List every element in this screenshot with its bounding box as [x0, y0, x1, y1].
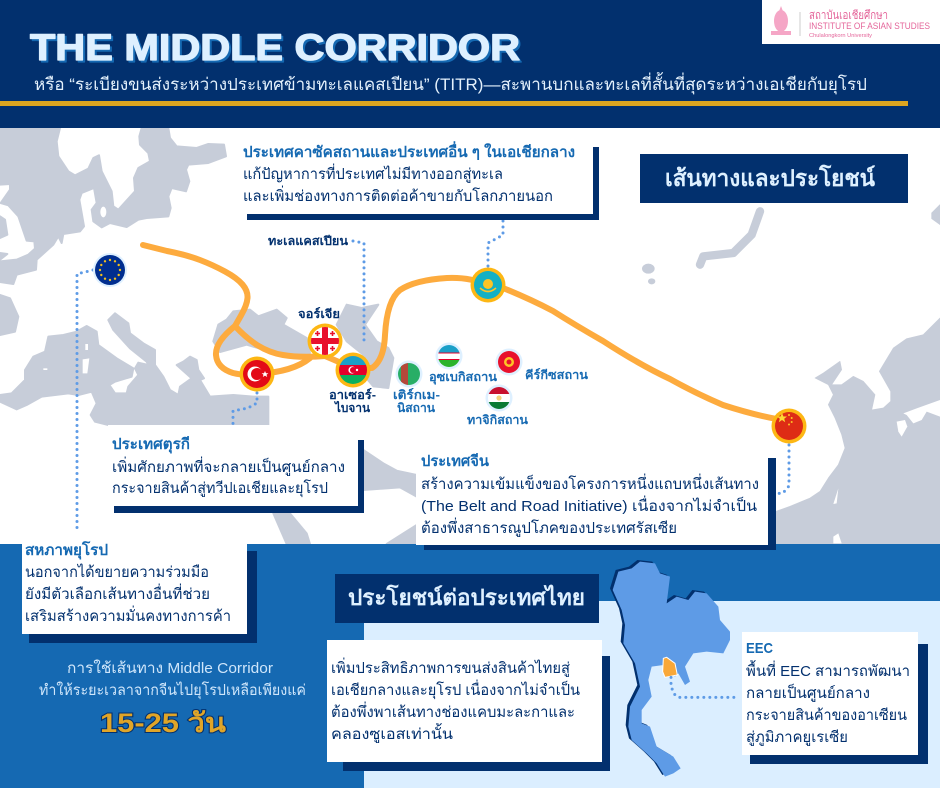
dotted leader: Kazakhstan [488, 215, 503, 268]
panel: benefits to Thailand text: ต้องพึ่งพาเส้นทางช่องแคบมะละกาและ [331, 701, 575, 721]
heading: benefits to Thailand [335, 574, 599, 623]
label: Azerbaijan [329, 388, 376, 415]
label: Uzbekistan: อุซเบกิสถาน [429, 370, 498, 385]
callout: transit time: ทำให้ระยะเวลาจากจีนไปยุโรปเหลือเพียงแค่ [39, 681, 306, 700]
panel: benefits to Thailand text: เพิ่มประสิทธิภาพการขนส่งสินค้าไทยสู่ [331, 657, 570, 677]
panel: benefits to Thailand text [327, 640, 610, 771]
dotted leader: Turkey [233, 393, 257, 425]
panel: European Union: นอกจากได้ขยายความร่วมมือ [25, 563, 209, 581]
route: corridor line [143, 245, 789, 421]
panel: European Union: ยังมีตัวเลือกเส้นทางอื่นที่ช่วย [25, 583, 210, 603]
label: Turkmenistan [393, 388, 440, 415]
panel: Turkey [108, 425, 364, 513]
flag: Tajikistan [486, 384, 512, 412]
panel: European Union [22, 540, 257, 643]
title: THE MIDDLE CORRIDOR [32, 29, 522, 70]
heading: routes and benefits [640, 154, 908, 203]
flag: China [772, 408, 806, 444]
icon: emblem [771, 6, 791, 35]
label: Caspian Sea: ทะเลแคสเปียน [268, 234, 349, 248]
logo: Institute of Asian Studies: INSTITUTE OF ASIAN STUDIES [809, 21, 930, 31]
panel: EEC [742, 632, 928, 764]
header banner [0, 0, 940, 128]
panel: Kazakhstan and Central Asia: และเพิ่มช่องทางการติดต่อค้าขายกับโลกภายนอก [243, 185, 553, 205]
dotted leader: China [772, 445, 789, 494]
flag: Georgia [308, 324, 342, 358]
label: Tajikistan: ทาจิกิสถาน [467, 413, 529, 427]
map: Europe and Asia water shapes [0, 128, 940, 545]
flag: Turkmenistan [396, 360, 422, 388]
panel: benefits to Thailand text: เอเชียกลางและยุโรป เนื่องจากไม่จำเป็น [331, 679, 580, 700]
title: THE MIDDLE CORRIDOR [30, 27, 520, 68]
panel: European Union: สหภาพยุโรป [25, 540, 108, 560]
subtitle: หรือ “ระเบียงขนส่งระหว่างประเทศข้ามทะเลแคสเปียน” (TITR)—สะพานบกและทะเลที่สั้นที่สุดระหว่างเอเชียกับยุโรป [34, 72, 867, 95]
panel: EEC: EEC [746, 640, 773, 657]
flag: Kazakhstan [470, 268, 506, 302]
panel: EEC: สู่ภูมิภาคยูเรเซีย [746, 729, 848, 746]
label: Azerbaijan: ไบจาน [333, 400, 371, 415]
panel: EEC: กลายเป็นศูนย์กลาง [746, 683, 870, 702]
panel: benefits to Thailand text: คลองซูเอสเท่านั้น [331, 723, 453, 743]
flag: EU [93, 253, 127, 287]
label: Turkmenistan: นิสถาน [397, 401, 436, 415]
heading: benefits to Thailand: ประโยชน์ต่อประเทศไทย [348, 584, 585, 610]
panel: European Union: เสริมสร้างความมั่นคงทางการค้า [25, 605, 231, 625]
panel: Turkey: เพิ่มศักยภาพที่จะกลายเป็นศูนย์กลาง [112, 456, 345, 476]
panel: EEC: กระจายสินค้าของอาเซียน [746, 707, 907, 724]
flag: Uzbekistan [436, 342, 462, 370]
panel: Kazakhstan and Central Asia [236, 132, 599, 220]
map: EEC area [663, 657, 677, 677]
map: Thailand [610, 560, 735, 777]
label: Turkmenistan: เติร์กเม- [393, 388, 440, 402]
panel: China: ประเทศจีน [421, 453, 490, 470]
label: Georgia: จอร์เจีย [298, 307, 340, 321]
bottom blue section [0, 544, 940, 788]
label: Kyrgyzstan: คีร์กีซสถาน [525, 368, 589, 382]
flag: Kyrgyzstan [496, 348, 522, 376]
panel: Kazakhstan and Central Asia: ประเทศคาซัคสถานและประเทศอื่น ๆ ในเอเชียกลาง [243, 141, 575, 161]
callout: transit time: 15-25 วัน [100, 708, 227, 738]
panel: China: (The Belt and Road Initiative) เนื่องจากไม่จำเป็น [421, 495, 757, 515]
flag: Turkey [240, 356, 274, 392]
panel: China [416, 448, 776, 550]
panel: Turkey: ประเทศตุรกี [112, 436, 190, 454]
panel: EEC: พื้นที่ EEC สามารถพัฒนา [746, 660, 910, 680]
dotted leader: Caspian [353, 241, 364, 341]
callout: transit time [39, 659, 306, 738]
logo: Institute of Asian Studies [762, 0, 940, 44]
panel: China: สร้างความเข้มแข็งของโครงการหนึ่งแถบหนึ่งเส้นทาง [421, 473, 759, 493]
panel: China: ต้องพึ่งสาธารณูปโภคของประเทศรัสเซีย [421, 517, 677, 537]
logo: Institute of Asian Studies: สถาบันเอเชียศึกษา [809, 8, 888, 22]
flag: Azerbaijan [336, 352, 370, 388]
dotted leader: EU [77, 270, 93, 530]
bottom light section [364, 601, 940, 788]
logo: Institute of Asian Studies: Chulalongkorn University [809, 33, 872, 39]
label: Azerbaijan: อาเซอร์- [329, 388, 376, 402]
dotted leader: EEC [671, 677, 735, 697]
heading: routes and benefits: เส้นทางและประโยชน์ [665, 164, 875, 191]
panel: Kazakhstan and Central Asia: แก้ปัญหาการที่ประเทศไม่มีทางออกสู่ทะเล [243, 163, 503, 183]
panel: Turkey: กระจายสินค้าสู่ทวีปเอเชียและยุโรป [112, 479, 328, 498]
callout: transit time: การใช้เส้นทาง Middle Corridor [67, 659, 273, 677]
